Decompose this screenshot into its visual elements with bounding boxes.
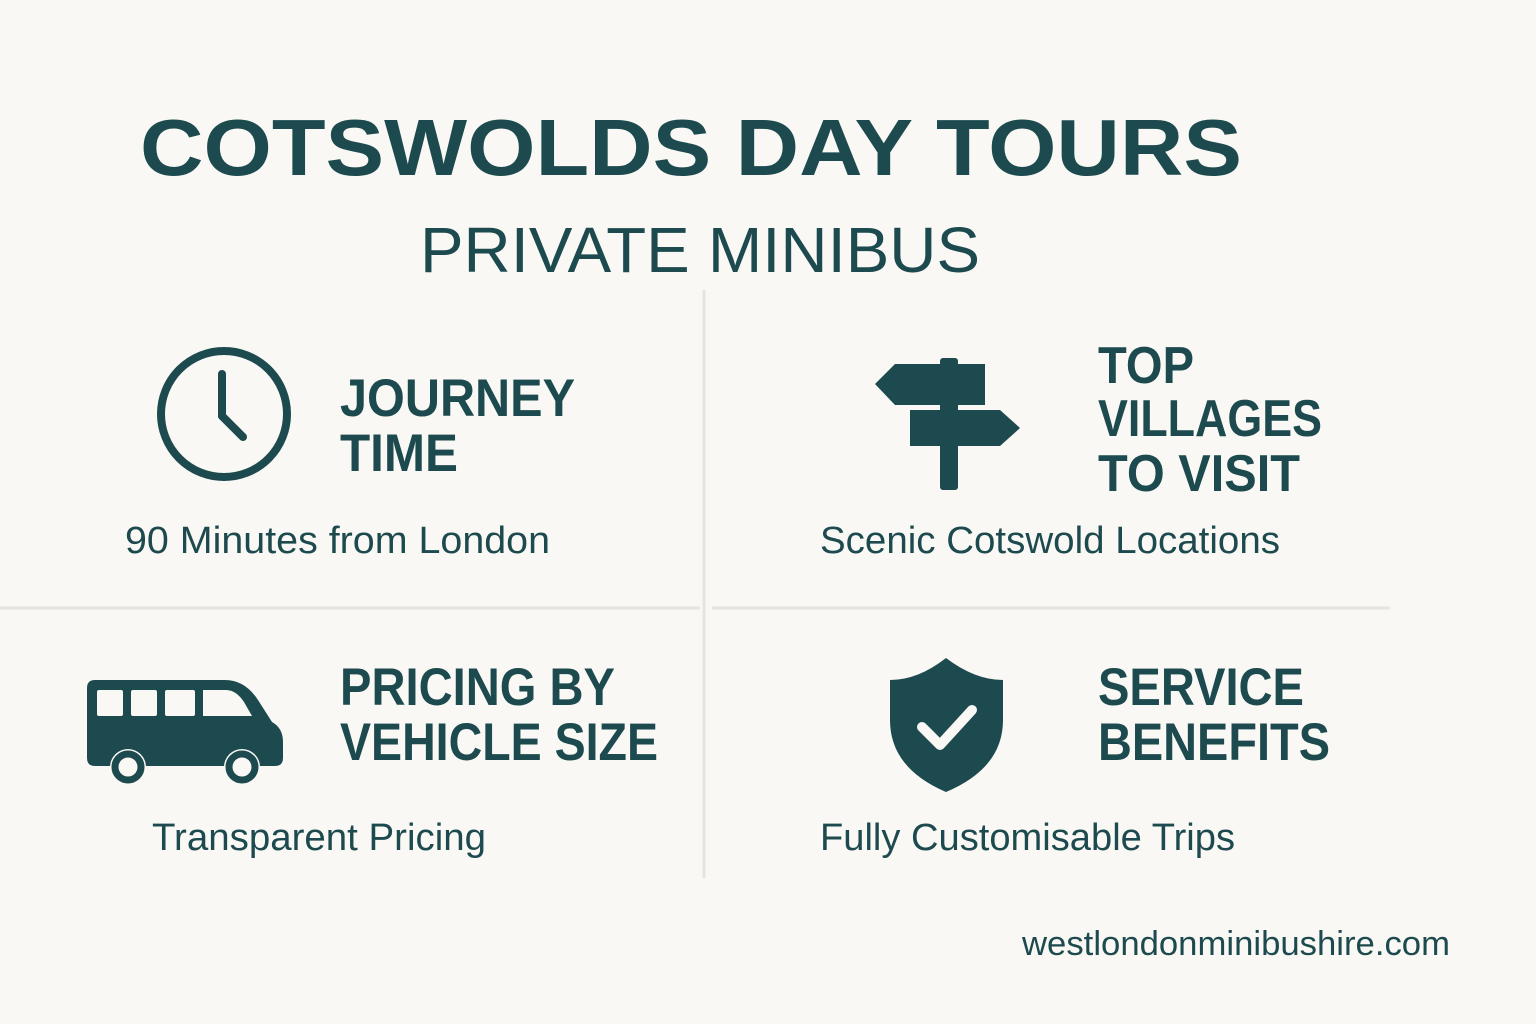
panel: service benefits: [820, 658, 1330, 859]
text: 90 minutes: 90 Minutes from London: [125, 520, 550, 562]
panel: top villages: TO VISIT: [1098, 445, 1300, 503]
heading: service benefits: SERVICE: [1098, 658, 1304, 717]
icon: shield: [890, 658, 1003, 792]
icon: signpost: [875, 358, 1020, 490]
text: scenic: Scenic Cotswold Locations: [820, 520, 1280, 562]
text: customisable: Fully Customisable Trips: [820, 817, 1235, 859]
footer url: westlondonminibushire.com: [1021, 925, 1450, 963]
panel: service benefits: BENEFITS: [1098, 713, 1330, 772]
subtitle: PRIVATE MINIBUS: [420, 214, 980, 286]
panel: pricing: [87, 658, 658, 859]
panel: top villages: [820, 337, 1322, 562]
panel: pricing: VEHICLE SIZE: [340, 713, 658, 772]
text: transparent pricing: Transparent Pricing: [152, 817, 486, 859]
heading: pricing: PRICING BY: [340, 658, 615, 717]
panel: journey time: TIME: [340, 424, 458, 483]
title: COTSWOLDS DAY TOURS: [140, 103, 1242, 192]
panel: journey time: [125, 351, 575, 562]
icon: clock: [161, 351, 287, 477]
heading: top villages: TOP: [1098, 337, 1194, 395]
heading: journey time: JOURNEY: [340, 369, 575, 428]
panel: top villages: VILLAGES: [1098, 390, 1322, 448]
icon: minibus: [87, 680, 283, 785]
